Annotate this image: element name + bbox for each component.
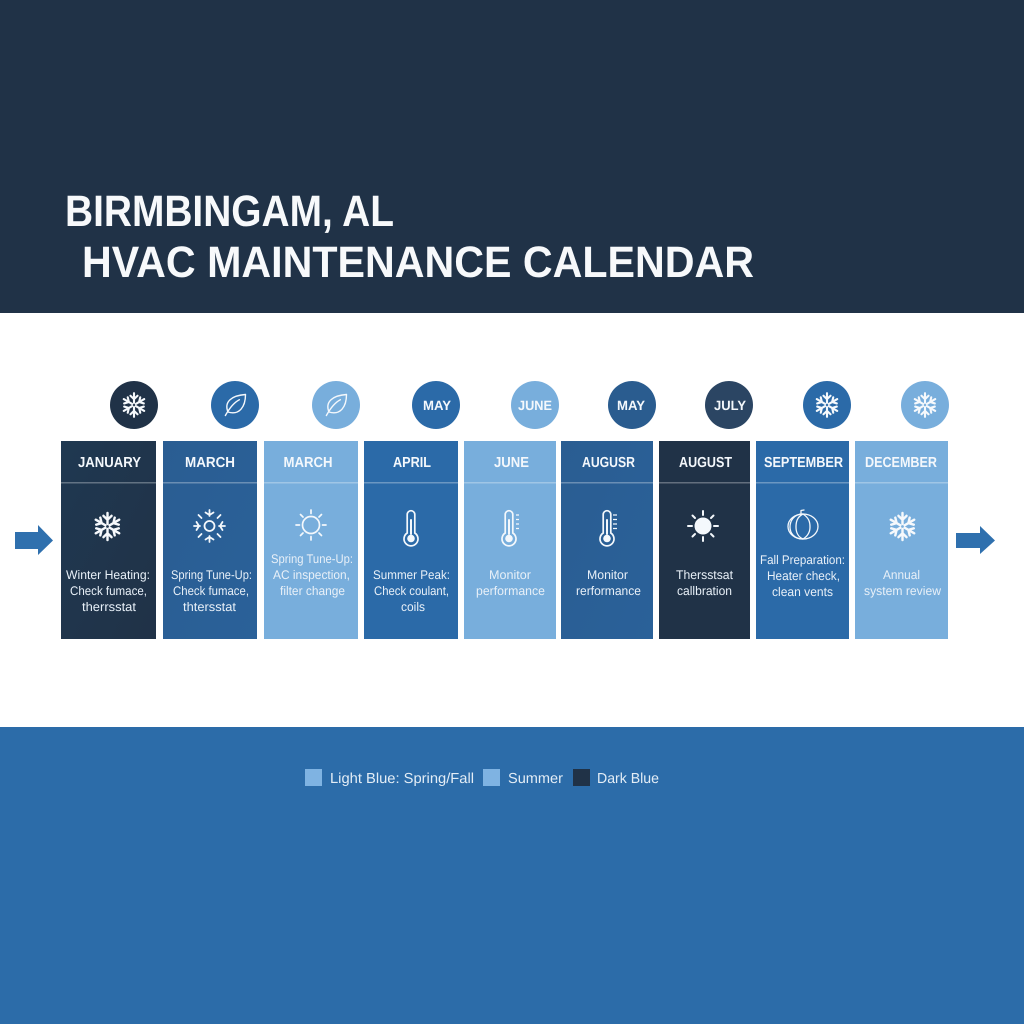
- title: HVAC MAINTENANCE CALENDAR: [82, 238, 754, 287]
- panel: August navy: [561, 441, 653, 639]
- panel: August navy: AUGUSR: [582, 455, 635, 471]
- panel: April: APRIL: [393, 455, 431, 471]
- panel: March spring: [264, 441, 358, 639]
- top badge: snowflake mid blue: [803, 381, 851, 429]
- legend: [305, 769, 659, 787]
- panel: March winter: [163, 441, 257, 639]
- legend swatch: dark blue: [573, 769, 590, 786]
- panel: September: [756, 441, 849, 639]
- panel: January: [61, 441, 156, 639]
- panel: January: therrsstat: [82, 600, 137, 614]
- arrow: timeline start: [15, 525, 53, 555]
- top badge: June: [511, 381, 559, 429]
- top badge: May navy: MAY: [617, 398, 645, 413]
- panel: March winter: Check fumace,: [173, 584, 249, 598]
- panel: March winter: thtersstat: [183, 600, 237, 614]
- panel: August dark: Thersstsat: [676, 568, 734, 582]
- panel: April: coils: [401, 600, 425, 614]
- panel: June: Monitor: [489, 568, 531, 582]
- title: BIRMBINGAM, AL: [65, 187, 394, 236]
- panel: April: Check coulant,: [374, 584, 449, 598]
- panel: August navy: Monitor: [587, 568, 628, 582]
- panel: September: clean vents: [772, 585, 833, 599]
- top badge: snowflake dark: [110, 381, 158, 429]
- panel: March spring: AC inspection,: [273, 568, 350, 582]
- panel: September: SEPTEMBER: [764, 455, 843, 471]
- icon: thermometer with ticks: [502, 511, 519, 546]
- legend label: dark blue: Dark Blue: [597, 771, 659, 787]
- icon: thermometer: [404, 511, 418, 546]
- panel: April: Summer Peak:: [373, 568, 450, 582]
- panel: March winter: Spring Tune-Up:: [171, 568, 252, 582]
- panel: December: Annual: [883, 568, 920, 582]
- legend label: summer: Summer: [508, 771, 563, 787]
- panel: June: performance: [476, 584, 545, 598]
- panel: August dark: AUGUST: [679, 455, 732, 471]
- title: [65, 187, 754, 287]
- icon: snowflake: [889, 513, 916, 540]
- top badge: leaf mid blue: [211, 381, 259, 429]
- top badge: leaf light blue: [312, 381, 360, 429]
- panel: December: [855, 441, 948, 639]
- panel: June: JUNE: [494, 455, 529, 471]
- icon: thermometer with ticks: [600, 511, 617, 546]
- legend label: light blue: Light Blue: Spring/Fall: [330, 771, 474, 787]
- top badge: July: [705, 381, 753, 429]
- panel: March spring: MARCH: [284, 455, 332, 471]
- legend swatch: light blue spring/fall: [305, 769, 322, 786]
- panel: March spring: Spring Tune-Up:: [271, 552, 353, 566]
- top badge: June: JUNE: [518, 398, 552, 413]
- header band: [0, 0, 1024, 313]
- panel: December: system review: [864, 584, 942, 598]
- panel: August dark: callbration: [677, 584, 732, 598]
- panel: December: DECEMBER: [865, 455, 937, 471]
- icon: snowflake: [94, 513, 121, 540]
- icon: ornate snowflake: [194, 510, 225, 542]
- icon: sun solid: [688, 511, 718, 541]
- panel: September: Heater check,: [767, 569, 840, 583]
- panel: August dark: [659, 441, 750, 639]
- top badge: May navy: [608, 381, 656, 429]
- legend swatch: summer: [483, 769, 500, 786]
- panel: September: Fall Preparation:: [760, 553, 845, 567]
- icon: sun outline: [296, 510, 326, 540]
- top badge: snowflake light blue: [901, 381, 949, 429]
- panel: January: JANUARY: [78, 455, 141, 471]
- panel: April: [364, 441, 458, 639]
- icon: pumpkin: [788, 510, 818, 539]
- panel: March winter: MARCH: [185, 455, 235, 471]
- panel: January: Check fumace,: [70, 584, 147, 598]
- panel: March spring: filter change: [280, 584, 345, 598]
- arrow: timeline end: [956, 526, 995, 554]
- top badge: July: JULY: [714, 398, 746, 413]
- footer band: [0, 727, 1024, 1024]
- panel: June: [464, 441, 556, 639]
- top badge: May: MAY: [423, 398, 451, 413]
- top badge: May: [412, 381, 460, 429]
- panel: August navy: rerformance: [576, 584, 641, 598]
- panel: January: Winter Heating:: [66, 568, 150, 582]
